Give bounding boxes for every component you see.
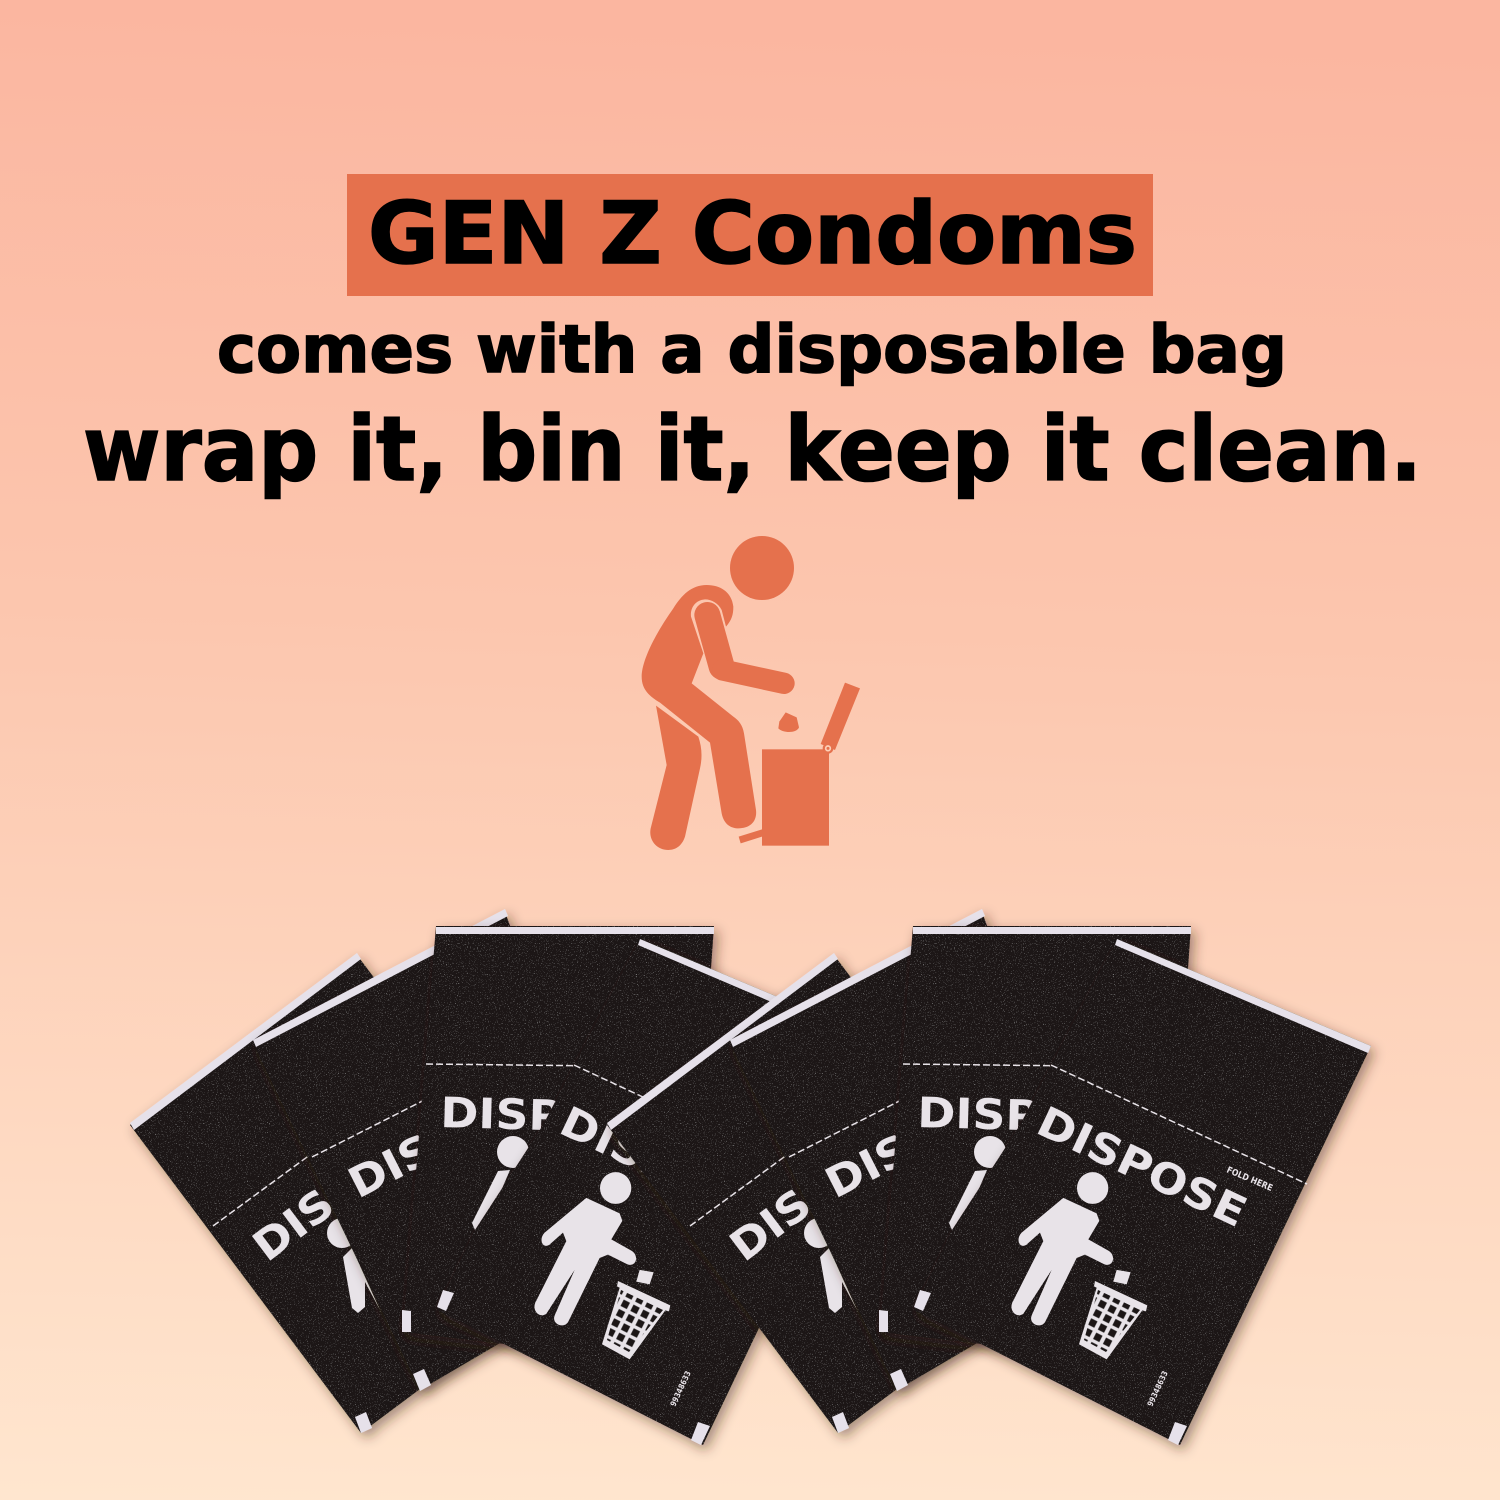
pictogram: figure and bin (534, 1172, 670, 1359)
tagline: wrap it, bin it, keep it clean. (83, 397, 1422, 501)
bag 3 right group (879, 926, 1191, 1365)
subtitle: comes with a disposable bag (217, 311, 1287, 388)
bag 3 right group: DISPOSE (917, 1088, 1143, 1143)
bag 3 left group: DISPOSE (440, 1088, 666, 1143)
bag 2 right group (730, 909, 1110, 1391)
left group of disposable bags (130, 909, 894, 1445)
pictogram: figure and bin (1011, 1172, 1147, 1359)
bag 4 left group: FOLD HERE (748, 1166, 797, 1194)
bag 4 right group: FOLD HERE (1225, 1166, 1274, 1194)
bag 1 left group: DISPOSE (244, 1096, 453, 1271)
bag label: DISPOSE (1030, 1097, 1254, 1237)
bag 1 left group (130, 953, 589, 1433)
bag 1 right group (607, 953, 1066, 1433)
bag 1 right group: DISPOSE (721, 1096, 930, 1271)
bag 2 left group (253, 909, 633, 1391)
title: GEN Z Condoms (368, 184, 1137, 284)
bag 2 left group: DISPOSE (340, 1062, 563, 1208)
bag label: DISPOSE (553, 1097, 777, 1237)
right group of disposable bags (607, 909, 1371, 1445)
bag 4 left group: 99348633 (669, 1370, 693, 1408)
bag 2 right group: DISPOSE (817, 1062, 1040, 1208)
bag 4 right group (914, 939, 1371, 1445)
bag 3 left group (402, 926, 714, 1365)
bag 4 right group: 99348633 (1146, 1370, 1170, 1408)
heading highlight box (347, 174, 1153, 296)
icon: person putting rubbish in pedal bin (642, 536, 860, 850)
bag 4 left group (437, 939, 894, 1445)
